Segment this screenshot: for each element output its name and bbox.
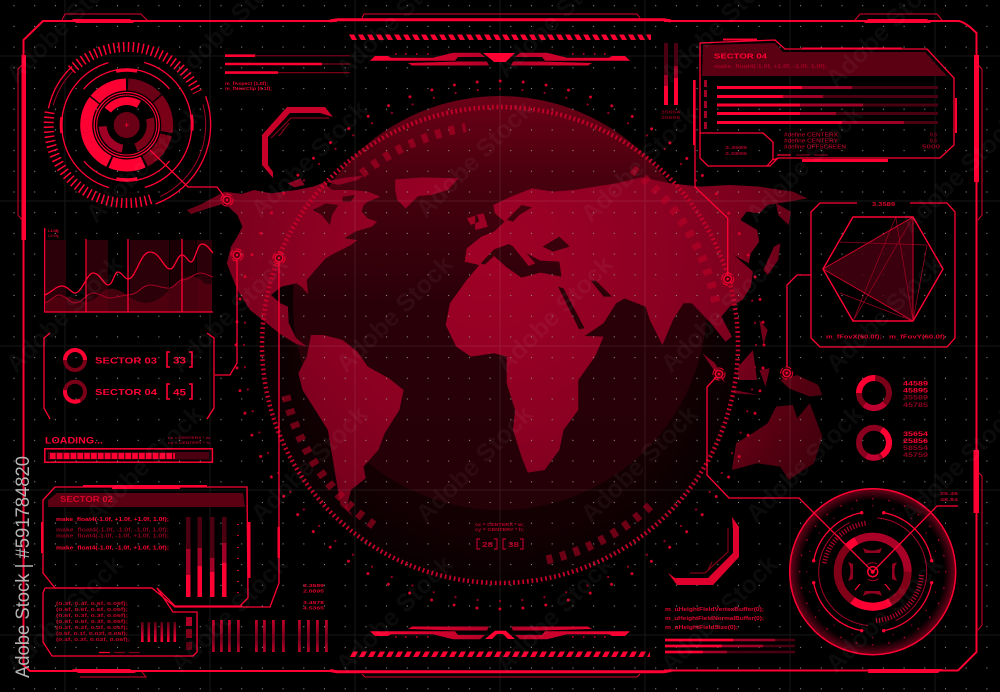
buffer labels: m_uHeightFieldSize(0); (665, 625, 738, 631)
watermark: Adobe Stock (165, 550, 293, 678)
sub panel: 2.0895 (725, 151, 747, 157)
donut gauges (853, 372, 895, 463)
numeric readout bottom: 3.4578 (303, 600, 324, 606)
numeric columns: 58554 (903, 445, 929, 452)
watermark: Adobe Stock (740, 100, 868, 228)
scope readout (940, 491, 958, 503)
progress rows (717, 88, 938, 122)
watermark: Adobe Stock (245, 400, 373, 528)
south america (298, 335, 404, 517)
top labels: aspect and clip (225, 56, 350, 92)
globe (263, 96, 737, 582)
panel: sector 04: SECTOR 04 (714, 52, 768, 60)
bottom-right radial scope (707, 374, 958, 655)
watermark: Adobe Stock (245, 95, 373, 223)
japan and kamchatka (763, 203, 791, 275)
buffer labels (665, 607, 795, 652)
donut 1 (853, 372, 895, 414)
center readout: 28 (482, 542, 493, 549)
watermark: Adobe Stock (330, 550, 458, 678)
panel: sector counters: SECTOR 04 (95, 387, 157, 397)
panel: sector 04: #define OFFSCREEN (784, 144, 846, 150)
italy and balkans (510, 243, 542, 266)
panel: sector 04: 5000 (922, 144, 940, 150)
donut 2 (854, 422, 894, 463)
panel: hexagon radar: m_fFovY(60.0f) (889, 334, 946, 340)
watermark: Adobe Stock (0, 550, 128, 678)
scattered dots (236, 81, 764, 609)
loading bar: cx = CENTERX * w; (168, 435, 211, 440)
bottom chevron (485, 631, 515, 639)
buffer labels: m_uHeightFieldNormalBuffer(0); (665, 616, 764, 622)
watermark: Adobe Stock (655, 550, 783, 678)
panel: sector 04: #define CENTERY (784, 138, 839, 144)
header band (702, 43, 947, 76)
top chevron (483, 53, 515, 62)
gauge connector line (150, 150, 227, 200)
radar ring (262, 107, 738, 583)
panel: hexagon radar (787, 202, 955, 367)
panel: hexagon radar: 3.3589 (872, 202, 895, 208)
panel: sector 02: make_float4(-1.0f, -1.0f, +1.0f, 1.0f); (56, 534, 169, 540)
panel: matrix data: (0.3f, 0.4f, 0.6f, 0.05f); (56, 601, 129, 607)
numeric columns: 35654 (903, 431, 929, 438)
loading bar (45, 435, 212, 462)
panel: matrix data: (0.5f, 0.1f, 0.02f, 0.05f); (56, 631, 129, 637)
panel: sector 02 (41, 485, 250, 607)
top ornament (349, 34, 651, 66)
watermark: Adobe Stock (410, 400, 538, 528)
world map (178, 176, 822, 517)
icon: ring 03 (65, 350, 85, 370)
panel: sector 04 (693, 38, 957, 275)
bracket ornament top (262, 107, 333, 178)
panel: matrix data: (0.2f, 0.2f, 0.2f, 0.01f); (56, 625, 129, 631)
loading bar: LOADING... (45, 436, 103, 446)
numeric readout bottom: 2.0895 (303, 588, 324, 594)
sector connector line (215, 255, 237, 375)
top-left radial gauge (19, 17, 234, 233)
bar groups bottom (212, 620, 328, 652)
line chart: i-0.0f); (48, 234, 59, 238)
numeric readout bottom: 4.5365 (303, 606, 324, 612)
sub panel (700, 133, 778, 166)
panel: sector counters (44, 333, 214, 419)
stock id vertical label: Adobe Stock | #591784820 (13, 456, 34, 678)
loading bar: cy = CENTERY * h; (168, 440, 211, 445)
top hatch bar (349, 34, 651, 40)
numeric columns: 45785 (903, 402, 929, 409)
uk and iceland (467, 213, 488, 230)
vertical bars (186, 517, 226, 597)
panel: matrix data: (0.6f, 0.3f, 0.3f, 0.05f); (56, 613, 129, 619)
watermark: Adobe Stock (490, 250, 618, 378)
numeric columns (903, 380, 929, 459)
line chart: i-1.0f); (48, 229, 59, 233)
top small bars: 25656 (661, 115, 681, 120)
center readout: 38 (508, 542, 519, 549)
map nodes (220, 193, 794, 381)
scope readout: 48.84 (940, 497, 958, 503)
panel: hexagon radar: m_fFovX(60.0f); (826, 334, 882, 340)
watermark: Adobe Stock (165, 250, 293, 378)
panel: sector 02: make_float4(-1.0f, -1.0f, -1.0f, 1.0f); (56, 528, 169, 534)
center readout: cy = CENTERY * h; (475, 527, 525, 532)
numeric columns: 35589 (903, 394, 929, 402)
panel: matrix data (43, 588, 197, 656)
watermark: Adobe Stock (740, 400, 868, 528)
top labels: aspect and clip: m_fAspect (1.0f); (225, 81, 268, 87)
numeric columns: 45895 (903, 388, 929, 394)
top small bars (661, 43, 681, 120)
watermark: Adobe Stock (490, 550, 618, 678)
header band (48, 493, 245, 507)
greenland (395, 177, 458, 208)
panel: sector 02: SECTOR 02 (60, 495, 114, 504)
panel: sector 02: make_float4(-1.0f, -1.0f, +1.0f, 1.0f); (56, 546, 169, 552)
panel: sector 02: make_float4(-1.0f, +1.0f, +1.0f, 1.0f); (56, 517, 169, 523)
panel: matrix data: (0.6f, 0.6f, 0.6f, 0.05f); (56, 607, 129, 613)
numeric readout bottom: 3.3589 (303, 583, 324, 589)
numeric readout bottom (303, 583, 324, 612)
panel: sector counters: SECTOR 03 (95, 356, 157, 366)
southeast asia (702, 320, 822, 397)
watermark: Adobe Stock (410, 95, 538, 223)
center readout: cx = CENTERX * w; (475, 522, 525, 527)
panel: sector 04: 0.5 (930, 132, 937, 138)
eurasia and africa (446, 177, 808, 473)
numeric columns: 44589 (903, 380, 929, 388)
icon: ring 04 (61, 378, 89, 405)
panel: matrix data: (0.4f, 0.3f, 0.02f, 0.05f); (56, 637, 131, 643)
watermark: Adobe Stock (655, 250, 783, 378)
long connector line (225, 258, 279, 607)
numeric columns: 25856 (903, 438, 929, 445)
panel: matrix data: (0.5f, 0.5f, 0.3f, 0.05f); (56, 619, 129, 625)
bottom hatch bar (350, 652, 650, 657)
panel: sector counters: 45 (173, 388, 186, 398)
watermark: Adobe Stock (0, 250, 128, 378)
bracket ornament bottom (668, 517, 739, 585)
line chart (45, 228, 213, 312)
bottom ornament (350, 626, 650, 657)
top small bars: 35654 (661, 110, 681, 114)
watermark: Adobe Stock (575, 400, 703, 528)
australia (732, 403, 822, 480)
sub panel: 3.3589 (725, 145, 747, 151)
panel: sector 04: make_float4(-1.0f, +1.0f, -1.0f, 1.0f); (714, 64, 827, 70)
panel: sector 04: 0.5 (930, 138, 937, 144)
center readout (475, 522, 525, 549)
scope readout: 25.46 (940, 491, 958, 497)
watermark: Adobe Stock (820, 550, 948, 678)
watermark: Adobe Stock (80, 400, 208, 528)
scope lines (707, 374, 958, 572)
watermark: Adobe Stock (330, 250, 458, 378)
top labels: aspect and clip: m_fNearClip (0.1f); (225, 86, 272, 92)
watermark: Adobe Stock (575, 100, 703, 228)
watermark: Adobe Stock (820, 250, 948, 378)
panel: sector 04: #define CENTERX (784, 132, 839, 138)
north america (178, 183, 380, 347)
numeric columns: 45759 (903, 452, 929, 459)
buffer labels: m_uHeightFieldVertexBuffer(0); (665, 607, 764, 613)
watermark: Adobe Stock (80, 100, 208, 228)
panel: sector counters: 33 (173, 356, 186, 366)
